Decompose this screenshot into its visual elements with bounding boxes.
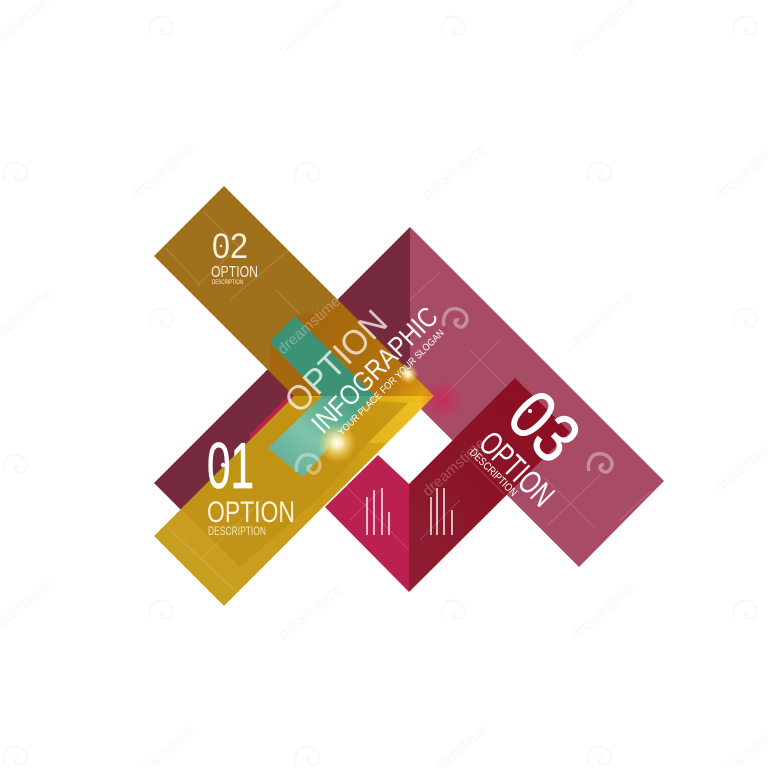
watermark pattern: dreamstime (128, 140, 199, 203)
center title: YOUR PLACE FOR YOUR SLOGAN (336, 328, 447, 438)
center title: INFOGRAPHIC (305, 301, 444, 439)
panel: crimson fold (325, 455, 409, 592)
icon: bars right (431, 488, 452, 535)
panel: dark red band 03 (409, 378, 570, 592)
watermark pattern: dreamstime (420, 140, 491, 203)
option 03 label (467, 375, 595, 514)
option 01 label: OPTION (207, 496, 295, 529)
center title (277, 301, 447, 439)
option 02 label: OPTION (211, 264, 258, 281)
panel: lower teal block (268, 396, 373, 477)
option 01 label: DESCRIPTION (208, 524, 266, 538)
option 02 label: DESCRIPTION (212, 280, 243, 286)
panel: yellow band 01 (154, 396, 434, 606)
watermark pattern: dreamstime (568, 580, 639, 643)
lens flares (317, 364, 464, 463)
option 03 label: 03 (493, 375, 595, 477)
center title: OPTION (277, 303, 395, 421)
darker overlay on brown band (295, 300, 434, 396)
watermark pattern: dreamstime (276, 580, 347, 643)
option 02 label: 02 (212, 227, 248, 266)
option 03 label: OPTION (472, 424, 562, 514)
option 03 label: DESCRIPTION (467, 447, 519, 499)
panel: rose band 03 (410, 227, 664, 567)
darker overlay on yellow band (181, 396, 408, 567)
watermarks on graphic (274, 293, 612, 500)
icon: bars left (367, 488, 389, 535)
option 01 label: 01 (207, 429, 254, 502)
panel: brown band 02 (154, 186, 434, 396)
watermarks on graphic: dreamstime (419, 435, 489, 500)
lighter overlay on yellow tip (368, 403, 427, 443)
panel: maroon band (154, 227, 410, 510)
watermarks on graphic: dreamstime (274, 293, 344, 358)
panel: upper teal block (269, 316, 375, 396)
option 01 label (207, 429, 295, 538)
option 02 label (211, 227, 258, 286)
watermark pattern: dreamstime (566, 288, 637, 351)
